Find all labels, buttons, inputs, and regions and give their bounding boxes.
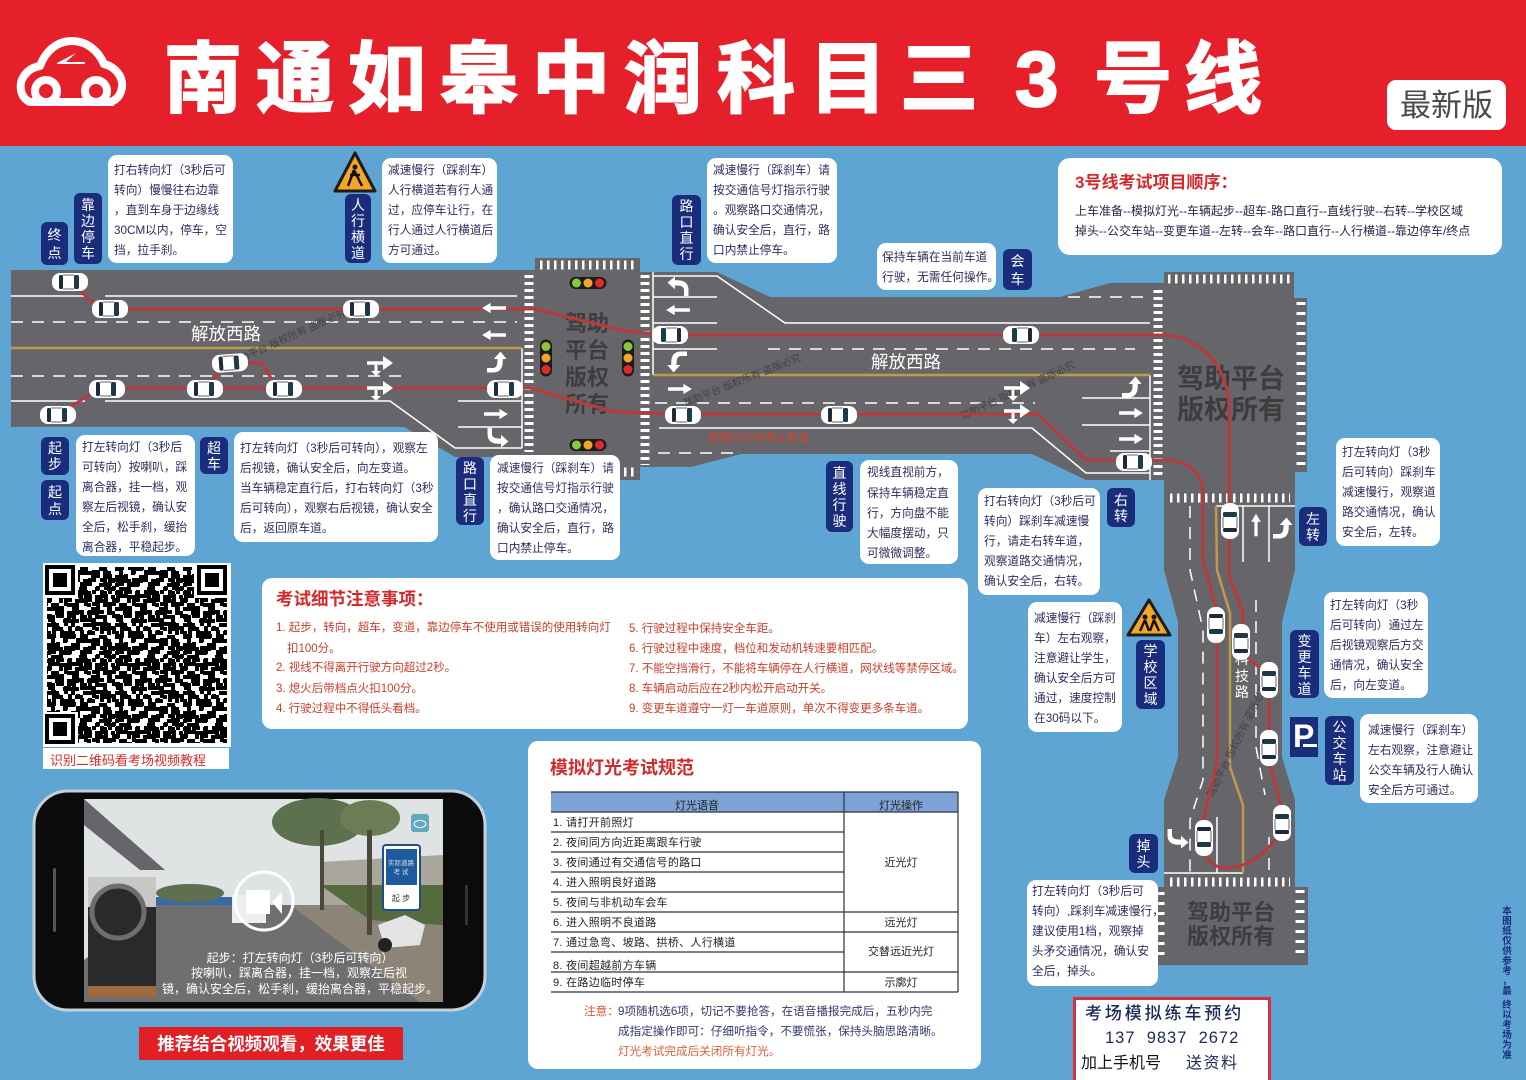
sign: road test [383,845,420,910]
note: change lane: 通情况，确认安全 [1330,658,1424,672]
panel: light simulation [528,741,981,1069]
note: straight at junction 2 [490,455,620,560]
contact heading: 考场模拟练车预约 [1085,1004,1244,1023]
note: overtake: 当车辆稳定直行后，打右转向灯（3秒 [240,481,434,495]
note: light rules: 成指定操作即可：仔细听指令，不要慌张，保持头脑思路清晰。 [618,1024,943,1038]
note: left turn: 减速慢行，观察道 [1342,485,1436,499]
table: light operations: 交替远近光灯 [868,944,934,958]
button: watch video [139,1027,403,1060]
note: start [76,435,195,556]
label: straight line [826,461,853,532]
table: light operations: 7. 通过急弯、坡路、拱桥、人行横道 [553,935,736,949]
note: crosswalk: 人行横道若有行人通 [388,183,494,197]
note: meeting cars: 保持车辆在当前车道 [882,250,988,264]
video caption: 起步：打左转向灯（3秒后可转向） [207,950,393,965]
note: overtake [234,432,438,542]
platform watermarks: 驾助 [565,311,609,336]
note: start: 全后，松手刹，缓抬 [82,520,188,534]
list: left column: 3. 熄火后带档点火扣100分。 [276,681,423,695]
side disclaimer: 本图纸仅供参考，最终以考场为准 [1502,905,1512,1061]
note: school zone: 车）左右观察， [1034,631,1116,645]
badge: latest edition [1387,80,1506,130]
icon: bus stop P sign [1290,717,1318,757]
route lines [58,282,1282,868]
text: exam order list: 掉头--公交车站--变更车道--左转--会车--路口直行--人行横道--靠边停车/终点 [1075,223,1470,238]
cars [40,273,1291,856]
panel: exam order [1058,158,1502,255]
table: light operations: 示廓灯 [884,975,918,989]
note: right turn [978,488,1100,595]
sign: road test: 实际道路 [388,858,414,867]
title: 南通如皋中润科目三3号线 [164,35,1262,123]
diagonal copyright marks: 驾助平台 版权所有 盗版必究 [958,358,1077,423]
note: bus stop: 公交车辆及行人确认 [1368,763,1474,777]
note: U-turn: 头矛交通情况，确认安 [1032,944,1149,958]
label: pull over [74,193,102,264]
note: right turn: 转向）踩刹车减速慢 [984,514,1090,528]
table: light operations: 8. 夜间超越前方车辆 [553,958,657,972]
icon: school sign [1128,600,1170,635]
note: crosswalk: 方可通过。 [388,243,446,257]
table: light operations: 远光灯 [884,915,918,929]
note: U-turn: 建议使用1档，观察掉 [1032,924,1144,938]
diagonal copyright marks: 驾助平台 版权所有 盗版必究 [228,306,348,369]
diagonal copyright marks [228,306,1271,799]
label: overtake: 超车 [207,440,221,472]
note: pull over: ，直到车身于边缘线 [114,203,220,217]
label: right turn [1107,488,1135,527]
label: bus stop: 公交车站 [1332,719,1346,783]
note: right turn: 观察道路交通情况， [984,554,1089,568]
table: light operations: 4. 进入照明良好道路 [553,875,657,889]
video caption: 按喇叭，踩离合器，挂一档，观察左后视 [191,965,407,980]
note: pull over: 挡，拉手刹。 [114,243,184,257]
note: change lane [1324,592,1428,698]
note: meeting cars: 行驶，无需任何操作。 [882,270,999,284]
note: change lane: 后，向左变道。 [1330,678,1412,692]
platform watermarks: 版权所有 [1187,924,1275,949]
note: right turn: 确认安全后，右转。 [984,574,1089,588]
contact action: 送资料 [1186,1054,1239,1072]
label: crosswalk [345,194,371,263]
label: start point [41,480,69,520]
label: straight at junction 2 [456,457,484,525]
traffic lights [540,277,634,451]
note: straight at junction 2: 确认安全后，直行，路 [497,521,614,535]
heading: exam order: 3号线考试项目顺序： [1075,172,1237,192]
red warning note: 距路口50米禁止变道 [709,430,809,444]
note: overtake: 后，返回原车道。 [240,521,334,535]
QR code [43,563,231,747]
platform watermarks: 版权所有 [1177,395,1285,425]
lane markings [11,265,1301,960]
icon: bus stop P sign: P [1293,718,1314,754]
button: watch video: 推荐结合视频观看，效果更佳 [157,1034,385,1054]
label: meeting cars [1003,249,1032,290]
contact box [1074,998,1270,1080]
panel: exam notes [262,578,968,729]
note: crosswalk [382,158,497,263]
note: start: 察左后视镜，确认安 [82,500,187,514]
note: crosswalk: 减速慢行（踩刹车） [388,163,493,177]
note: straight at junction 2: ，确认路口交通情况， [497,501,614,515]
label: start: 起步 [48,440,62,472]
note: school zone: 通过，速度控制 [1034,691,1116,705]
note: start: 打左转向灯（3秒后 [82,440,182,454]
note: U-turn: 转向）,踩刹车减速慢行， [1032,904,1164,918]
note: left turn: 打左转向灯（3秒 [1342,445,1431,459]
road name vertical: 科技路 [1235,651,1249,700]
note: crosswalk: 过，应停车让行，在 [388,203,493,217]
note: left turn: 后可转向）踩刹车 [1342,465,1436,479]
table: light operations: 灯光语音 [675,798,719,812]
table: light operations: 3. 夜间通过有交通信号的路口 [553,855,702,869]
note: straight at junction 2: 减速慢行（踩刹车）请 [497,461,614,475]
table: light operations: 5. 夜间与非机动车会车 [553,895,668,909]
note: crosswalk: 行人通过人行横道后 [388,223,494,237]
note: school zone [1028,602,1122,732]
note: straight at junction: 确认安全后，直行，路 [713,223,830,237]
diagonal copyright marks: 驾助平台 版权所有 盗版必究 [681,351,803,410]
note: bus stop: 安全后方可通过。 [1368,783,1462,797]
label: straight at junction: 路口直行 [680,198,694,262]
note: U-turn [1027,880,1164,986]
note: straight at junction: 。观察路口交通情况， [713,203,830,217]
label: straight line: 直线行驶 [832,465,846,529]
note: straight at junction: 口内禁止停车。 [713,243,795,257]
note: overtake: 打左转向灯（3秒后可转向），观察左 [240,441,428,455]
label: school zone [1136,640,1165,709]
note: pull over: 打右转向灯（3秒后可 [114,163,226,177]
note: pull over: 30CM以内，停车，空 [114,223,227,237]
label: start [41,437,69,475]
diagonal copyright marks: 驾助平台 版权所有 盗版必究 [1204,681,1271,799]
road name left: 解放西路 [191,324,261,344]
label: right turn: 右转 [1114,492,1128,524]
label: school zone: 学校区域 [1144,643,1158,707]
note: straight at junction: 减速慢行（踩刹车）请 [713,163,830,177]
text: exam order list: 上车准备--模拟灯光--车辆起步--超车-路口直行--直线行驶--右转--学校区域 [1075,203,1463,218]
note: straight at junction 2: 口内禁止停车。 [497,541,579,555]
note: school zone: 确认安全后方可 [1034,671,1116,685]
note: pull over: 转向）慢慢往右边靠 [114,183,220,197]
list: right column: 7. 不能空挡滑行，不能将车辆停在人行横道，网状线等禁停区域。 [629,661,964,675]
label: bus stop [1325,716,1354,785]
note: bus stop: 左右观察，注意避让 [1368,743,1474,757]
note: bus stop: 减速慢行（踩刹车） [1368,723,1473,737]
QR caption: 识别二维码看考场视频教程 [50,753,206,768]
table: light operations [551,792,958,992]
note: U-turn: 打左转向灯（3秒后可 [1032,884,1144,898]
platform watermarks: 所有 [565,392,609,417]
note: left turn: 安全后，左转。 [1342,525,1424,539]
table: light operations: 9. 在路边临时停车 [553,975,645,989]
note: straight at junction [707,158,837,263]
note: start: 离合器，挂一档，观 [82,480,188,494]
video screen [84,798,443,1002]
phone mockup [34,791,485,1010]
note: right turn: 打右转向灯（3秒后可 [984,494,1096,508]
note: overtake: 后可转向），观察右后视镜，确认安全 [240,501,433,515]
note: right turn: 行，请走右转车道， [984,534,1089,548]
contact action: 加上手机号 [1081,1054,1161,1072]
note: left turn: 路交通情况，确认 [1342,505,1436,519]
table: light operations: 2. 夜间同方向近距离跟车行驶 [553,835,702,849]
badge: latest edition: 最新版 [1400,88,1493,123]
list: left column: 扣100分。 [287,641,341,655]
platform watermarks: 版权 [565,365,609,390]
road map [11,258,1308,965]
list: left column: 4. 行驶过程中不得低头看档。 [276,701,427,715]
note: start: 可转向）按喇叭，踩 [82,460,188,474]
note: straight line: 大幅度摆动，只 [867,526,949,540]
note: meeting cars [877,243,999,290]
list: right column: 8. 车辆启动后应在2秒内松开启动开关。 [629,681,832,695]
sign: road test: 起 步 [392,894,410,903]
note: change lane: 后视镜观察后方交 [1330,638,1424,652]
list: right column: 9. 变更车道遵守一灯一车道原则，单次不得变更多条车道。 [629,701,929,715]
label: crosswalk: 人行横道 [351,197,365,261]
list: right column: 6. 行驶过程中速度，档位和发动机转速要相匹配。 [629,641,883,655]
label: left turn: 左转 [1306,511,1320,543]
note: straight line: 行，方向盘不能 [867,506,949,520]
note: straight line: 视线直视前方， [867,465,949,479]
label: meeting cars: 会车 [1010,253,1024,287]
note: straight line: 保持车辆稳定直 [867,486,949,500]
icon: cloud badge [411,814,429,832]
note: light rules: 9项随机选6项，切记不要抢答，在语音播报完成后，五秒内完 [618,1004,933,1018]
note: light rules: 注意： [584,1004,619,1018]
note: change lane: 打左转向灯（3秒 [1330,598,1419,612]
platform watermarks [565,311,1285,949]
note: bus stop [1360,714,1478,803]
label: U-turn: 掉头 [1136,838,1150,870]
note: start: 离合器，平稳起步。 [82,540,187,554]
label: U-turn [1129,834,1158,873]
list: right column: 5. 行驶过程中保持安全车距。 [629,621,780,635]
label: straight at junction 2: 路口直行 [463,460,477,524]
note: light rules: 灯光考试完成后关闭所有灯光。 [618,1044,780,1058]
road name right: 解放西路 [871,352,941,372]
platform watermarks: 平台 [565,338,609,363]
label: start point: 起点 [48,484,62,517]
note: school zone: 减速慢行（踩刹 [1034,611,1116,625]
heading: exam notes: 考试细节注意事项： [276,589,434,609]
icon: video play [235,872,293,930]
note: straight at junction: 按交通信号灯指示行驶 [713,183,830,197]
list: left column: 1. 起步，转向，超车，变道，靠边停车不使用或错误的使用转向灯 [276,620,611,634]
label: overtake [200,437,228,474]
label: change lane [1290,630,1319,698]
icon: pedestrian sign [335,153,375,191]
label: pull over: 靠边停车 [81,197,95,261]
list: left column: 2. 视线不得离开行驶方向超过2秒。 [276,660,456,674]
note: school zone: 在30码以下。 [1034,712,1105,725]
lane arrows [367,276,1292,848]
icon: car logo [21,41,122,106]
label: end point [41,222,68,265]
label: change lane: 变更车道 [1298,633,1312,697]
note: pull over [108,155,233,263]
heading: light simulation: 模拟灯光考试规范 [550,758,694,778]
label: straight at junction [672,195,701,265]
label: end point: 终点 [48,227,62,261]
platform watermarks: 驾助平台 [1187,900,1275,925]
table: light operations: 近光灯 [884,855,918,869]
table: light operations: 1. 请打开前照灯 [553,815,634,829]
note: U-turn: 全后，掉头。 [1032,964,1102,978]
sign: road test: 考 试 [394,867,409,876]
contact phone: 137 9837 2672 [1105,1029,1239,1047]
note: left turn [1336,438,1440,546]
header banner [0,0,1526,146]
table: light operations: 6. 进入照明不良道路 [553,915,657,929]
note: school zone: 注意避让学生， [1034,651,1116,665]
table: light operations: 灯光操作 [879,798,923,812]
video caption: 镜，确认安全后，松手刹，缓抬离合器，平稳起步。 [162,981,438,996]
note: straight at junction 2: 按交通信号灯指示行驶 [497,481,614,495]
note: straight line: 可微微调整。 [867,546,937,560]
platform watermarks: 驾助平台 [1177,363,1285,394]
note: change lane: 后可转向）通过左 [1330,618,1424,632]
note: straight line [860,460,958,564]
note: overtake: 后视镜，确认安全后，向左变道。 [240,461,415,475]
QR caption [43,748,229,769]
road surface [11,258,1308,965]
label: left turn [1299,507,1327,546]
